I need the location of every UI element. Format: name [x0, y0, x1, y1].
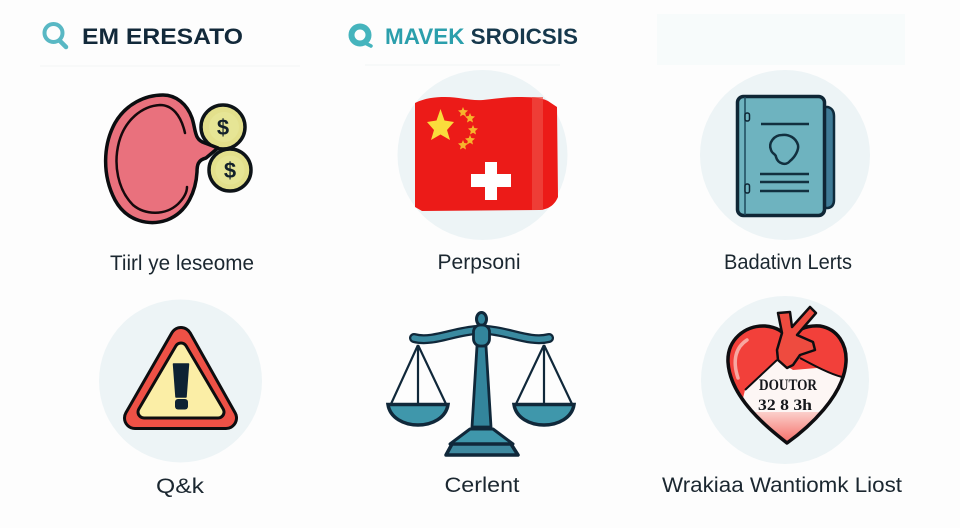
heading: left section [44, 24, 243, 49]
panel: warning [99, 300, 262, 498]
heading: middle section [352, 24, 578, 49]
icon: anatomical heart with label: 32 8 3h [758, 397, 812, 414]
icon: teal search bubble [352, 26, 371, 46]
label: heart: Wrakiaa Wantiomk Liost [662, 474, 902, 497]
icon circle: book backdrop [700, 70, 870, 240]
star: large [427, 109, 454, 140]
label: flag: Perpsoni [438, 251, 520, 274]
heading text: middle: MAVEK SROICSIS [385, 24, 578, 49]
icon circle: heart backdrop [701, 296, 869, 464]
icon: stomach with dollar coins [106, 95, 251, 223]
label: stomach: Tiirl ye leseome [110, 252, 254, 275]
panel: flag [398, 70, 568, 274]
panel: stomach with coins [106, 95, 254, 275]
icon: red flag with stars and cross [415, 97, 558, 211]
cross: white [471, 162, 511, 200]
header band: right (empty) [657, 14, 905, 65]
icon: balance scales [388, 312, 574, 455]
heading text: left: EM ERESATO [82, 24, 243, 49]
stars: small [458, 107, 478, 150]
icon circle: flag backdrop [398, 70, 568, 240]
icon: anatomical heart with label: DOUTOR [759, 377, 817, 394]
label: scales: Cerlent [444, 474, 520, 497]
label: book: Badativn Lerts [724, 251, 852, 274]
icon: warning triangle [135, 338, 226, 418]
icon: teal book [738, 96, 834, 216]
icon: anatomical heart with label [726, 306, 848, 445]
icon: stomach with dollar coins: $ [224, 158, 236, 183]
panel: scales [388, 312, 574, 497]
label: warning: Q&k [156, 475, 205, 498]
icon: stomach with dollar coins: $ [217, 115, 229, 140]
panel: heart [662, 296, 902, 497]
icon: magnifier [44, 24, 66, 47]
icon circle: warning backdrop [99, 300, 262, 462]
panel: book [700, 70, 870, 274]
